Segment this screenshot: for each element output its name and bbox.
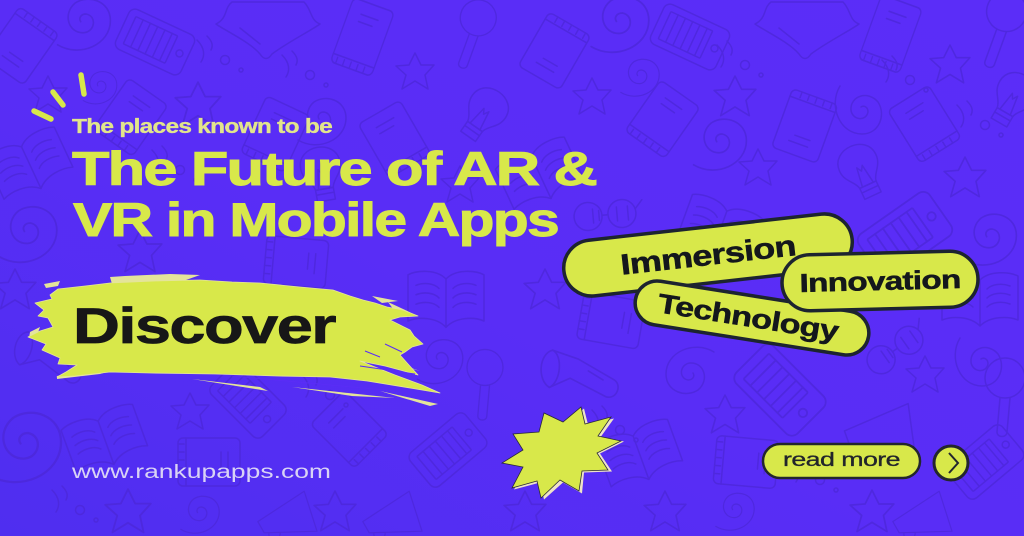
pill: Technology: Technology xyxy=(656,288,841,347)
subtitle: The places known to be xyxy=(72,115,332,138)
icon: spark lines xyxy=(34,75,84,119)
title: VR in Mobile Apps xyxy=(73,193,558,246)
arrow button xyxy=(934,446,968,480)
title: The Future of AR & xyxy=(72,142,597,195)
pill: Innovation xyxy=(781,251,979,311)
pill: Immersion xyxy=(561,211,855,299)
read more button: read more xyxy=(783,450,900,471)
pill: Technology xyxy=(632,278,872,358)
title xyxy=(72,142,597,246)
website url: www.rankupapps.com xyxy=(71,462,331,483)
pill: Immersion: Immersion xyxy=(619,230,797,282)
starburst xyxy=(502,407,624,500)
brush stroke badge: Discover xyxy=(28,274,440,406)
pill: Innovation: Innovation xyxy=(799,264,961,298)
tag pills xyxy=(561,211,979,358)
brush label: Discover xyxy=(73,298,336,354)
read more button xyxy=(763,444,920,478)
